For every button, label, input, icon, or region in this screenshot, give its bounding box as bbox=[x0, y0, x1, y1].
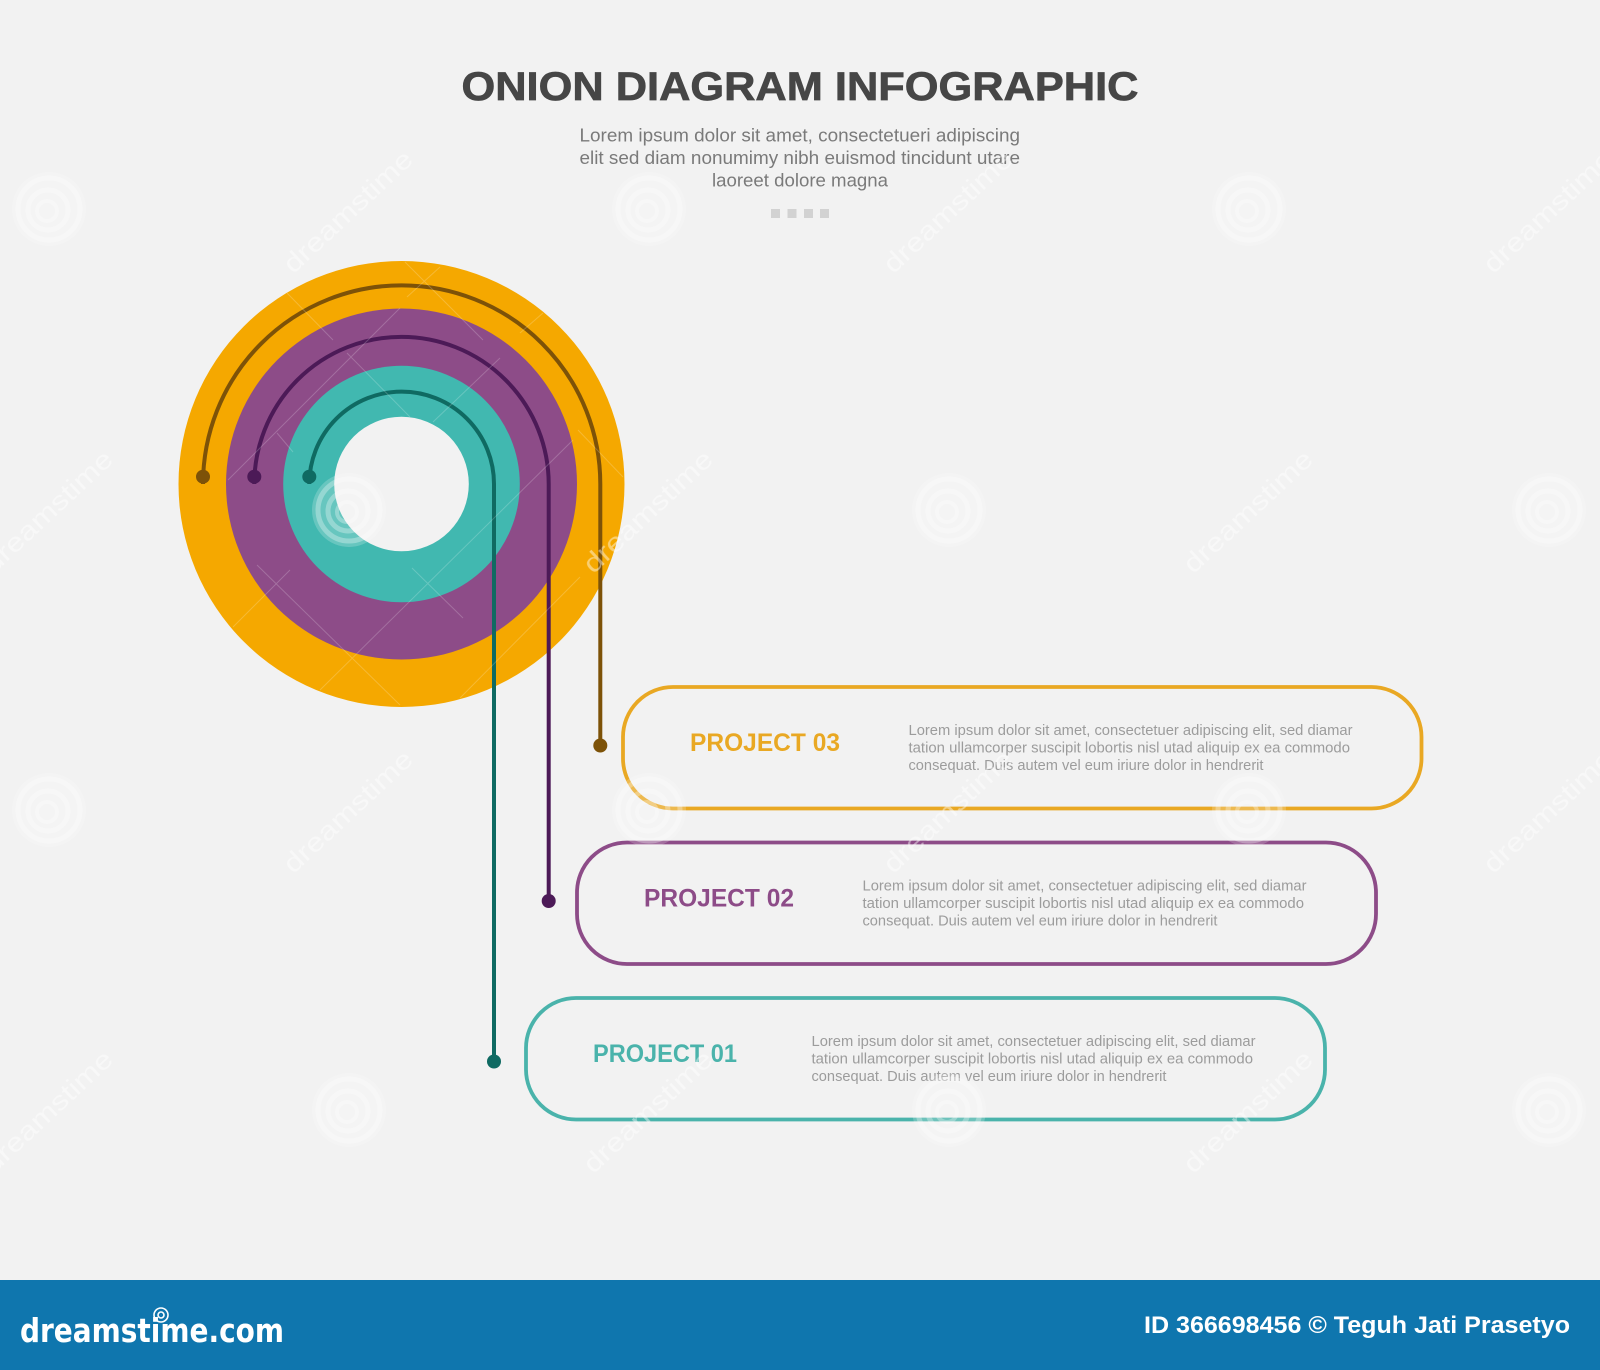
project 01 label: PROJECT 01 bbox=[593, 1041, 737, 1068]
subtitle text block: laoreet dolore magna bbox=[712, 170, 889, 190]
watermark overlay: dreamstime bbox=[577, 444, 719, 579]
project 02 description: Lorem ipsum dolor sit amet, consectetuer adipiscing elit, sed diamar bbox=[862, 878, 1307, 894]
project 03 label: PROJECT 03 bbox=[690, 730, 840, 757]
core bbox=[334, 417, 469, 551]
title: ONION DIAGRAM INFOGRAPHIC bbox=[462, 65, 1138, 109]
project 01 description bbox=[812, 1034, 1256, 1085]
project 02 description: tation ullamcorper suscipit lobortis nisl utad aliquip ex ea commodo bbox=[862, 896, 1304, 912]
project 02 label: PROJECT 02 bbox=[644, 886, 794, 912]
watermark overlay: dreamstime bbox=[277, 144, 419, 279]
subtitle text block: elit sed diam nonumimy nibh euismod tincidunt utare bbox=[580, 147, 1020, 168]
onion diagram circles bbox=[178, 261, 624, 707]
panel: project 01 bbox=[526, 998, 1325, 1120]
project 03 description: tation ullamcorper suscipit lobortis nisl utad aliquip ex ea commodo bbox=[908, 740, 1350, 756]
project 01 description: Lorem ipsum dolor sit amet, consectetuer adipiscing elit, sed diamar bbox=[812, 1034, 1256, 1050]
heading divider dots bbox=[771, 209, 829, 218]
project 02 description bbox=[862, 878, 1307, 930]
outer layer: project 03 bbox=[178, 261, 624, 707]
panel: project 02 bbox=[577, 842, 1376, 964]
watermark overlay: dreamstime bbox=[1177, 444, 1319, 579]
watermark overlay: dreamstime bbox=[1477, 144, 1600, 279]
watermark overlay: dreamstime bbox=[277, 744, 419, 879]
project 02 description: consequat. Duis autem vel eum iriure dolor in hendrerit bbox=[862, 914, 1218, 930]
footer credit: ID 366698456 © Teguh Jati Prasetyo bbox=[1144, 1312, 1570, 1339]
project 01 description: consequat. Duis autem vel eum iriure dolor in hendrerit bbox=[812, 1069, 1166, 1085]
footer logo wordmark: dreamstime.com bbox=[20, 1311, 284, 1350]
watermark overlay: dreamstime bbox=[577, 1044, 719, 1179]
project 03 description: Lorem ipsum dolor sit amet, consectetuer adipiscing elit, sed diamar bbox=[908, 723, 1353, 739]
watermark overlay: dreamstime bbox=[877, 744, 1019, 879]
watermark overlay: dreamstime bbox=[1177, 1044, 1319, 1179]
panel: project 03 bbox=[623, 687, 1422, 808]
middle layer: project 02 bbox=[226, 308, 577, 660]
connector: project 02 bbox=[247, 337, 556, 908]
connector: project 01 bbox=[302, 392, 501, 1068]
inner layer: project 01 bbox=[283, 366, 520, 602]
subtitle text block: Lorem ipsum dolor sit amet, consectetueri adipiscing bbox=[580, 124, 1020, 146]
icon: footer logo spiral bbox=[154, 1308, 168, 1322]
watermark overlay bbox=[0, 144, 1600, 1179]
project 03 description: consequat. Duis autem vel eum iriure dolor in hendrerit bbox=[908, 758, 1264, 774]
footer band bbox=[0, 1280, 1600, 1370]
project 01 description: tation ullamcorper suscipit lobortis nisl utad aliquip ex ea commodo bbox=[812, 1052, 1253, 1068]
watermark overlay: dreamstime bbox=[877, 144, 1019, 279]
watermark overlay: dreamstime bbox=[1477, 744, 1600, 879]
project 03 description bbox=[908, 723, 1353, 774]
connector: project 03 bbox=[196, 285, 607, 752]
subtitle text block bbox=[580, 124, 1020, 190]
